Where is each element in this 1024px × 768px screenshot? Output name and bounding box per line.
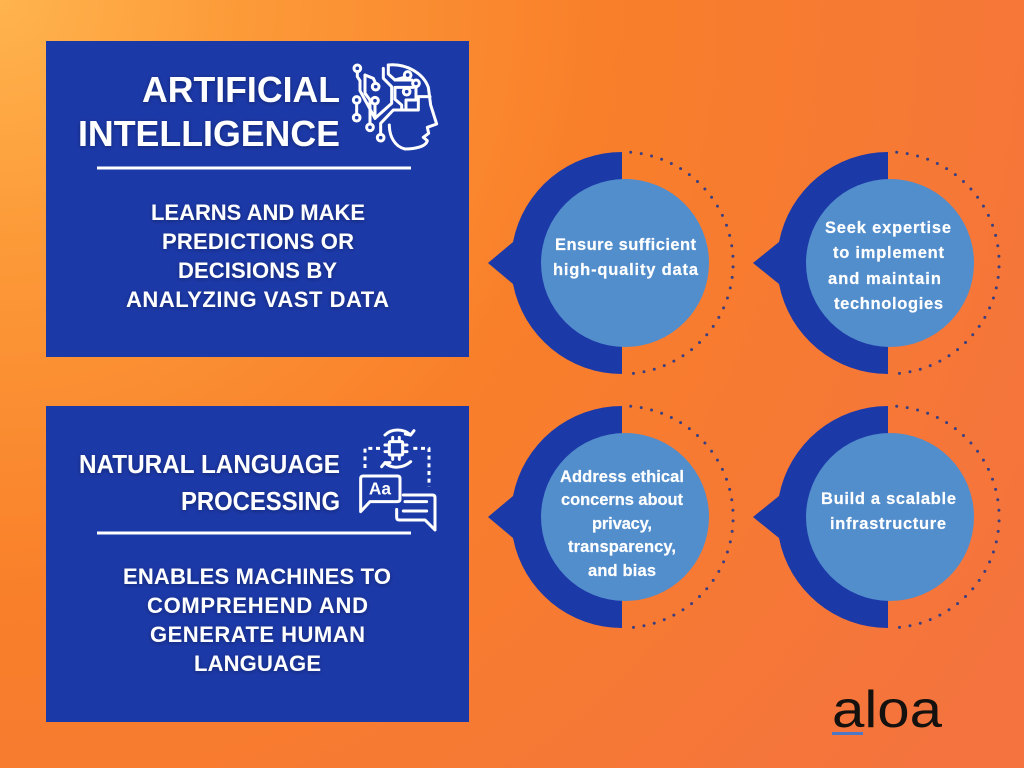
callout: seek expertise [753,152,999,374]
heading: natural language processing [79,451,340,516]
callout: seek expertise: technologies [834,295,943,313]
text: natural language processing description: GENERATE HUMAN [150,622,365,647]
text: artificial intelligence description: DECISIONS BY [178,258,337,283]
panel: artificial intelligence [46,41,469,357]
callout: ensure data: Ensure sufficient [555,236,696,254]
callout: ensure data: high-quality data [553,261,699,279]
heading: artificial intelligence [78,69,340,154]
icon: language processing chat: Aa [369,479,391,499]
text: artificial intelligence description [126,200,389,312]
callout: seek expertise: Seek expertise [825,219,951,237]
text: natural language processing description: LANGUAGE [194,651,321,676]
divider: artificial intelligence [97,166,411,170]
heading: natural language processing: NATURAL LANGUAGE [79,451,340,479]
callout: ensure data [488,152,733,374]
divider: natural language processing [97,532,411,534]
heading: artificial intelligence: INTELLIGENCE [78,113,340,154]
callout: address ethical concerns: and bias [588,562,656,580]
text: natural language processing description: ENABLES MACHINES TO [123,564,391,589]
callout: seek expertise: to implement [833,244,944,262]
heading: natural language processing: PROCESSING [181,488,340,516]
callout: scalable infrastructure: infrastructure [830,515,946,533]
callout: scalable infrastructure [753,406,999,628]
callout: address ethical concerns: privacy, [592,515,652,533]
panel: natural language processing [46,406,469,722]
text: natural language processing description: COMPREHEND AND [147,593,368,618]
heading: artificial intelligence: ARTIFICIAL [142,69,340,110]
callout: address ethical concerns: concerns about [561,491,684,509]
callout: scalable infrastructure: Build a scalable [821,490,956,508]
callout: address ethical concerns: transparency, [568,538,676,556]
icon: language processing chat [361,430,435,530]
text: artificial intelligence description: ANALYZING VAST DATA [126,287,389,312]
text: natural language processing description [123,564,391,676]
logo: aloa: aloa [832,681,942,739]
text: artificial intelligence description: LEARNS AND MAKE [151,200,365,225]
callout: seek expertise: and maintain [828,270,941,288]
callout: address ethical concerns [488,406,733,628]
text: artificial intelligence description: PREDICTIONS OR [162,229,354,254]
icon: circuit brain head [353,65,437,149]
callout: address ethical concerns: Address ethical [560,468,684,486]
